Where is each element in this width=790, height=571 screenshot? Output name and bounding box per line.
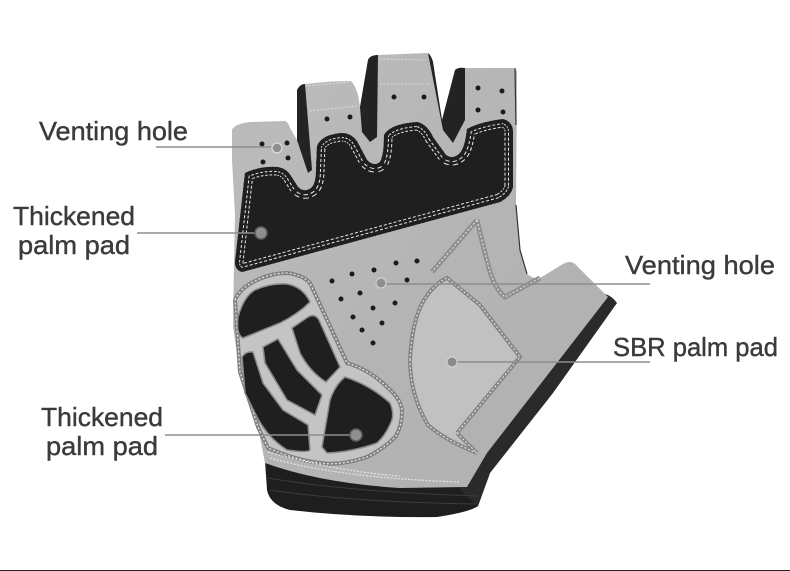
lower stitched pad outline	[235, 273, 402, 464]
marker: venting hole palm	[376, 278, 386, 288]
glove illustration	[232, 53, 617, 517]
cuff ribbing	[268, 478, 478, 504]
outer thumb band	[460, 294, 617, 506]
leader lines	[137, 147, 650, 435]
thumb crease	[432, 220, 540, 297]
label: venting hole right: Venting hole	[625, 250, 775, 280]
label: thickened palm pad upper: Thickened	[13, 201, 135, 231]
finger seams	[305, 59, 430, 111]
label: thickened palm pad upper: palm pad	[18, 230, 130, 260]
label: thickened palm pad lower: Thickened	[41, 402, 163, 432]
label: SBR palm pad: SBR palm pad	[613, 332, 778, 362]
SBR palm pad	[410, 278, 520, 453]
venting holes: palm	[330, 258, 420, 346]
cuff seam stitches	[268, 452, 460, 482]
cuff	[265, 461, 490, 517]
black finger gussets	[297, 53, 465, 173]
glove edge lines	[515, 68, 527, 274]
label: venting hole upper left: Venting hole	[39, 116, 188, 146]
venting holes: fingers	[260, 86, 506, 164]
label: thickened palm pad lower: palm pad	[46, 431, 158, 461]
glove body	[232, 53, 608, 488]
lower palm pads: black	[238, 284, 393, 453]
marker: venting hole finger	[272, 143, 282, 153]
label: thickened palm pad lower	[41, 402, 163, 461]
marker: thickened palm pad lower	[350, 429, 362, 441]
marker: SBR palm pad	[447, 357, 457, 367]
label: thickened palm pad upper	[13, 201, 135, 260]
marker: thickened palm pad upper	[255, 227, 267, 239]
palm pad: upper black	[235, 119, 513, 272]
